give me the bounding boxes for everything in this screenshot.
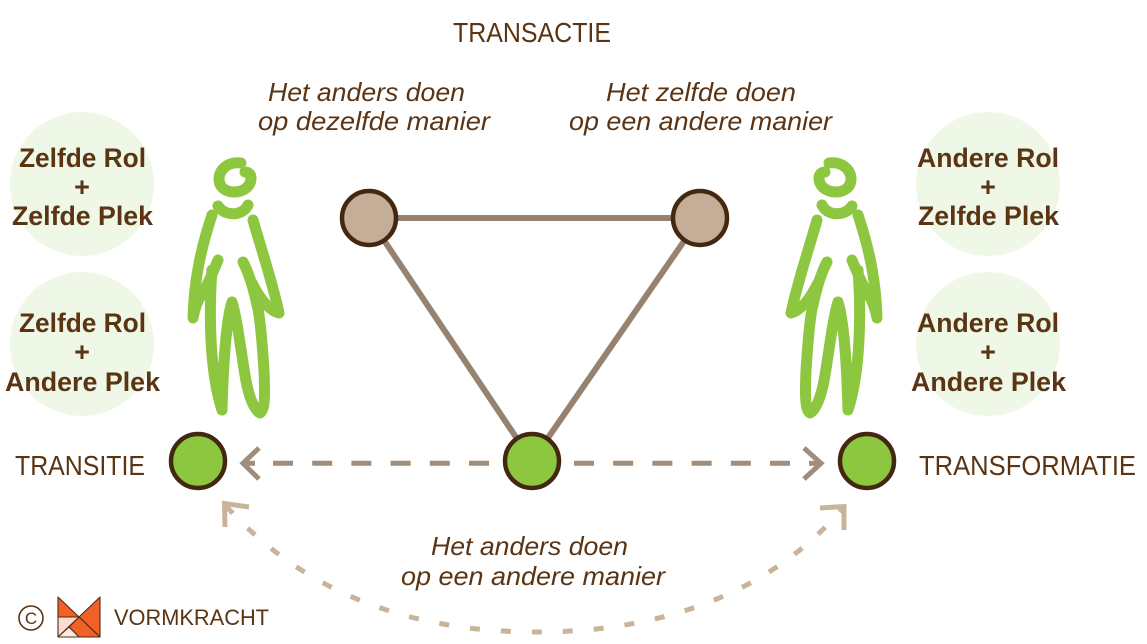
arrow: curved between transitie and transformatie	[224, 504, 844, 632]
panel: Andere Rol + Andere Plek: Andere Plek	[911, 367, 1067, 397]
caption: right top: op een andere manier	[569, 106, 833, 136]
panel: Andere Rol + Zelfde Plek: Andere Rol	[917, 143, 1059, 173]
arrow: to transformatie	[574, 448, 821, 479]
panel: Andere Rol + Zelfde Plek: +	[980, 172, 996, 202]
panel: Andere Rol + Andere Plek: Andere Rol	[917, 308, 1059, 338]
copyright symbol: C	[25, 609, 37, 628]
caption: bottom	[401, 531, 666, 591]
node: transformatie	[840, 434, 894, 488]
label: transformatie: TRANSFORMATIE	[919, 450, 1136, 481]
triangle diagram	[342, 191, 727, 488]
caption: left top	[258, 77, 491, 136]
caption: right top: Het zelfde doen	[606, 77, 796, 107]
panel: Zelfde Rol + Zelfde Plek: +	[74, 172, 90, 202]
panel: Zelfde Rol + Andere Plek: +	[74, 337, 90, 367]
node: transitie	[171, 434, 225, 488]
panel: Zelfde Rol + Zelfde Plek: Zelfde Rol	[19, 143, 146, 173]
panel: Zelfde Rol + Andere Plek: Zelfde Rol	[19, 308, 146, 338]
panel: Zelfde Rol + Zelfde Plek	[10, 112, 154, 256]
panel: Zelfde Rol + Andere Plek	[5, 272, 161, 416]
panel: Zelfde Rol + Zelfde Plek: Zelfde Plek	[12, 201, 154, 231]
caption: bottom: op een andere manier	[401, 561, 666, 591]
label: transitie: TRANSITIE	[15, 450, 145, 481]
arrow: to transitie	[242, 448, 489, 479]
panel: Zelfde Rol + Andere Plek: Andere Plek	[5, 367, 161, 397]
panel: Andere Rol + Andere Plek: +	[980, 337, 996, 367]
title: TRANSACTIE	[453, 17, 611, 48]
caption: bottom: Het anders doen	[431, 531, 628, 561]
caption: right top	[569, 77, 833, 136]
logo: fox	[58, 597, 100, 637]
brand name: VORMKRACHT	[114, 605, 269, 630]
icon: right person	[791, 163, 877, 413]
panel: Andere Rol + Andere Plek	[911, 272, 1067, 416]
icon: left person	[193, 163, 279, 413]
caption: left top: Het anders doen	[268, 77, 465, 107]
panel: Andere Rol + Zelfde Plek: Zelfde Plek	[918, 201, 1060, 231]
panel: Andere Rol + Zelfde Plek	[916, 112, 1060, 256]
copyright symbol	[19, 606, 43, 630]
caption: left top: op dezelfde manier	[258, 106, 491, 136]
